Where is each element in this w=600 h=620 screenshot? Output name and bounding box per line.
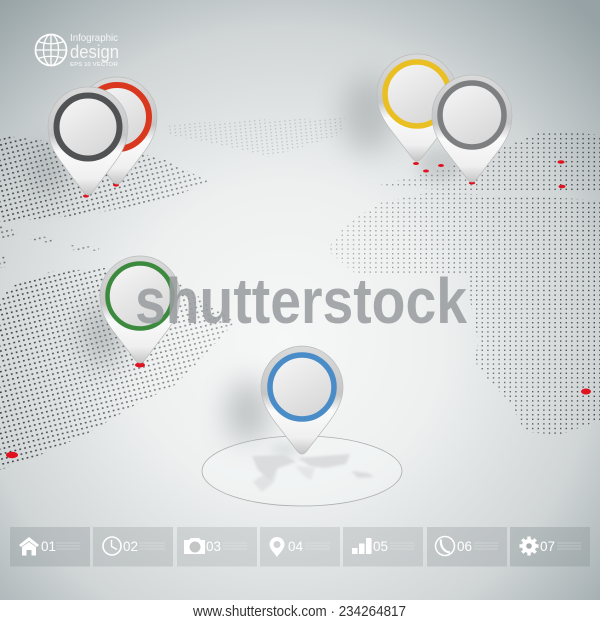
icon strip (10, 527, 590, 566)
tile 02: clock: 02 (123, 539, 138, 554)
tile 02: clock (93, 527, 173, 566)
tile 05: bar chart (343, 527, 423, 566)
dotted world map (0, 118, 600, 470)
oval with mini world map (202, 436, 402, 506)
icon: globe (36, 34, 66, 66)
pin: green (100, 256, 180, 363)
pin: dark gray (48, 87, 128, 195)
tile 01: home: 01 (41, 539, 56, 554)
pin: red (77, 77, 157, 184)
tile 07: gear (510, 527, 590, 566)
pin: blue (261, 346, 343, 454)
tile 04: map pin: 04 (288, 539, 304, 554)
pin: yellow (377, 54, 457, 161)
tile 04: map pin (260, 527, 340, 566)
tile 06: phone: 06 (457, 539, 472, 554)
tile 03: camera (177, 527, 257, 566)
watermark: shutterstock (135, 265, 467, 337)
tile 06: phone (427, 527, 507, 566)
tile 07: gear: 07 (540, 539, 555, 554)
logo text (70, 33, 119, 68)
logo text: design (70, 42, 119, 62)
tile 03: camera: 03 (206, 539, 221, 554)
stock id caption: www.shutterstock.com · 234264817 (192, 604, 406, 620)
logo text: Infographic (70, 33, 118, 44)
pin shadows (28, 77, 462, 456)
pin: medium gray (432, 75, 512, 182)
logo (36, 33, 119, 68)
logo text: EPS 10 VECTOR (70, 62, 118, 68)
red location dots (6, 160, 591, 458)
tile 05: bar chart: 05 (373, 539, 388, 554)
tile 01: home (10, 527, 90, 566)
